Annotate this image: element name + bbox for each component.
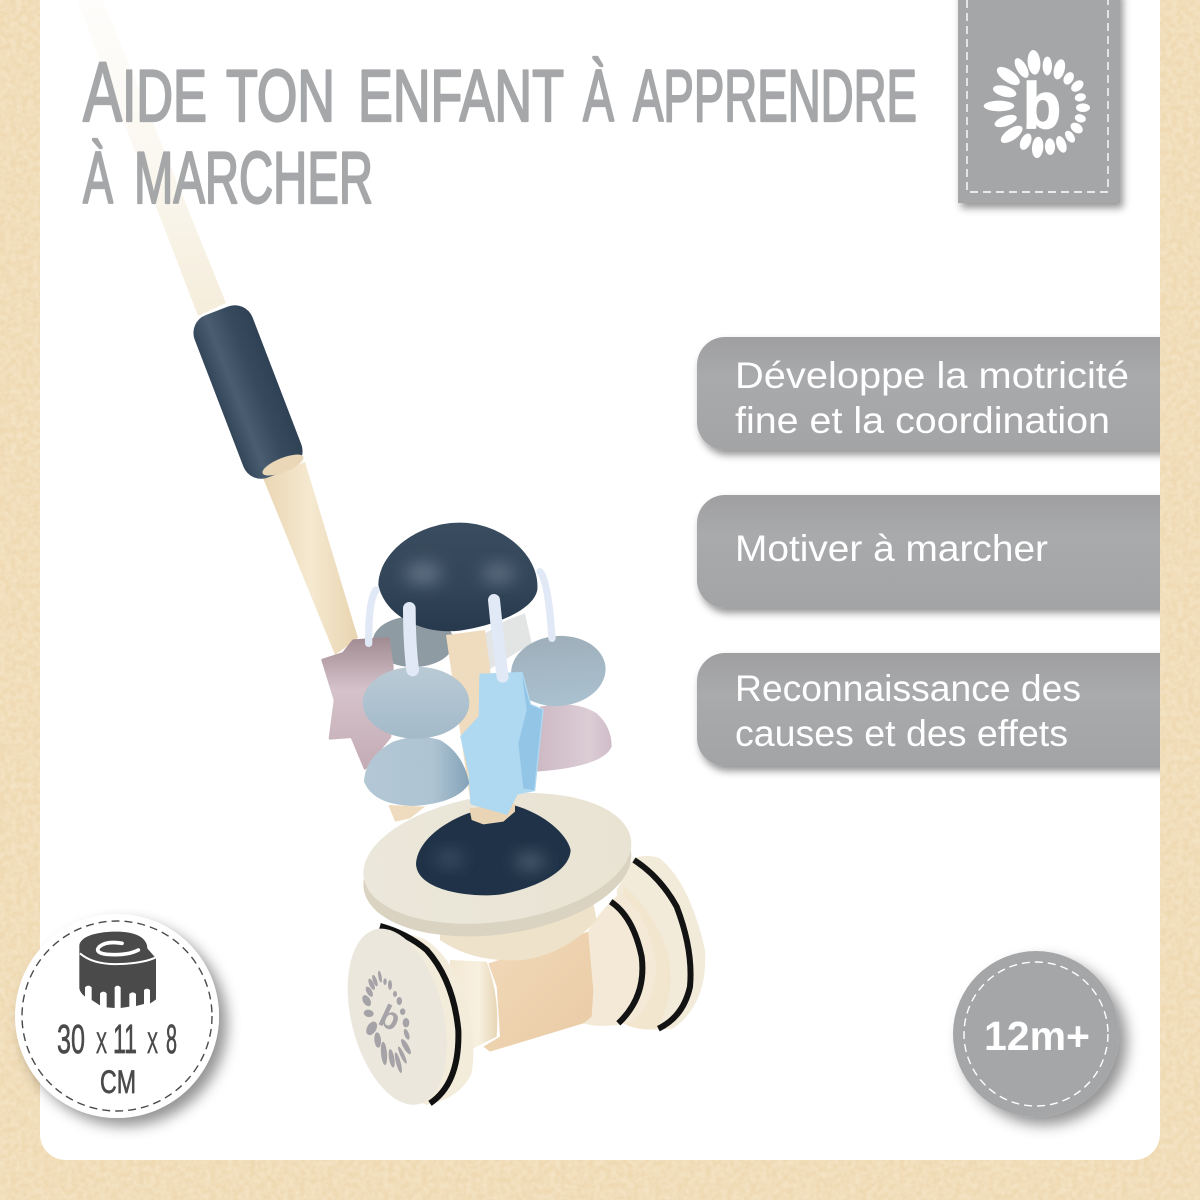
logo tag: b (1023, 69, 1061, 142)
toy: right bead (508, 632, 609, 710)
toy: back parts (323, 613, 532, 822)
toy: hanging mobile (363, 523, 612, 813)
size text: 11 (113, 1016, 137, 1062)
feature pill: motivation (697, 495, 1170, 608)
toy: strings (369, 572, 552, 677)
feature pill: cause and effect (697, 653, 1170, 766)
toy: top dome (378, 523, 537, 631)
age badge: 12m+ (984, 1013, 1090, 1059)
toy: under cone (440, 903, 597, 960)
title: À (83, 138, 113, 219)
feature pill: cause and effect: Reconnaissance des (735, 668, 1081, 709)
icon: measuring tape (79, 932, 156, 1008)
size badge (15, 914, 219, 1118)
toy: far wheel (617, 856, 705, 1030)
title: À (583, 56, 614, 137)
toy: wheels and base (331, 777, 705, 1115)
title: ENFANT (358, 56, 564, 137)
toy: blue star (462, 673, 542, 813)
feature pill: motor skills: fine et la coordination (735, 400, 1110, 441)
toy: axle block (483, 932, 593, 1052)
title: MARCHER (134, 138, 373, 219)
title: AIDE (83, 45, 207, 139)
size text: X (147, 1027, 158, 1060)
title: APPRENDRE (633, 56, 917, 137)
size badge: 8 (166, 1016, 177, 1062)
toy: bottom dome (416, 805, 571, 895)
toy: front wheel (331, 918, 473, 1115)
toy: pink dome (537, 704, 612, 772)
logo tag (958, 0, 1120, 203)
toy: handle (188, 300, 358, 655)
icon: sun logo (984, 49, 1090, 158)
feature pill: motor skills: Développe la motricité (735, 355, 1129, 396)
icon: wheel logo (360, 970, 413, 1074)
toy: lower left dome (364, 737, 469, 806)
feature pill: motivation: Motiver à marcher (735, 528, 1048, 569)
toy: push walker (188, 300, 705, 1115)
toy: middle wheel (583, 893, 656, 1026)
age badge (953, 951, 1119, 1117)
toy: column stub (469, 803, 515, 824)
size text: 30 (57, 1016, 85, 1062)
toy: base plate (355, 777, 640, 952)
feature pill: cause and effect: causes et des effets (735, 713, 1068, 754)
toy: inner axle cylinder (450, 960, 497, 1048)
title (83, 45, 917, 219)
title: TON (226, 56, 335, 137)
icon: wheel logo: b (374, 997, 406, 1038)
size text (57, 1016, 177, 1100)
size text: X (96, 1027, 107, 1060)
toy: faded upper pole (77, 0, 226, 316)
feature pill: motor skills (697, 337, 1170, 450)
size text: CM (100, 1064, 136, 1100)
toy: left bead (363, 667, 469, 739)
